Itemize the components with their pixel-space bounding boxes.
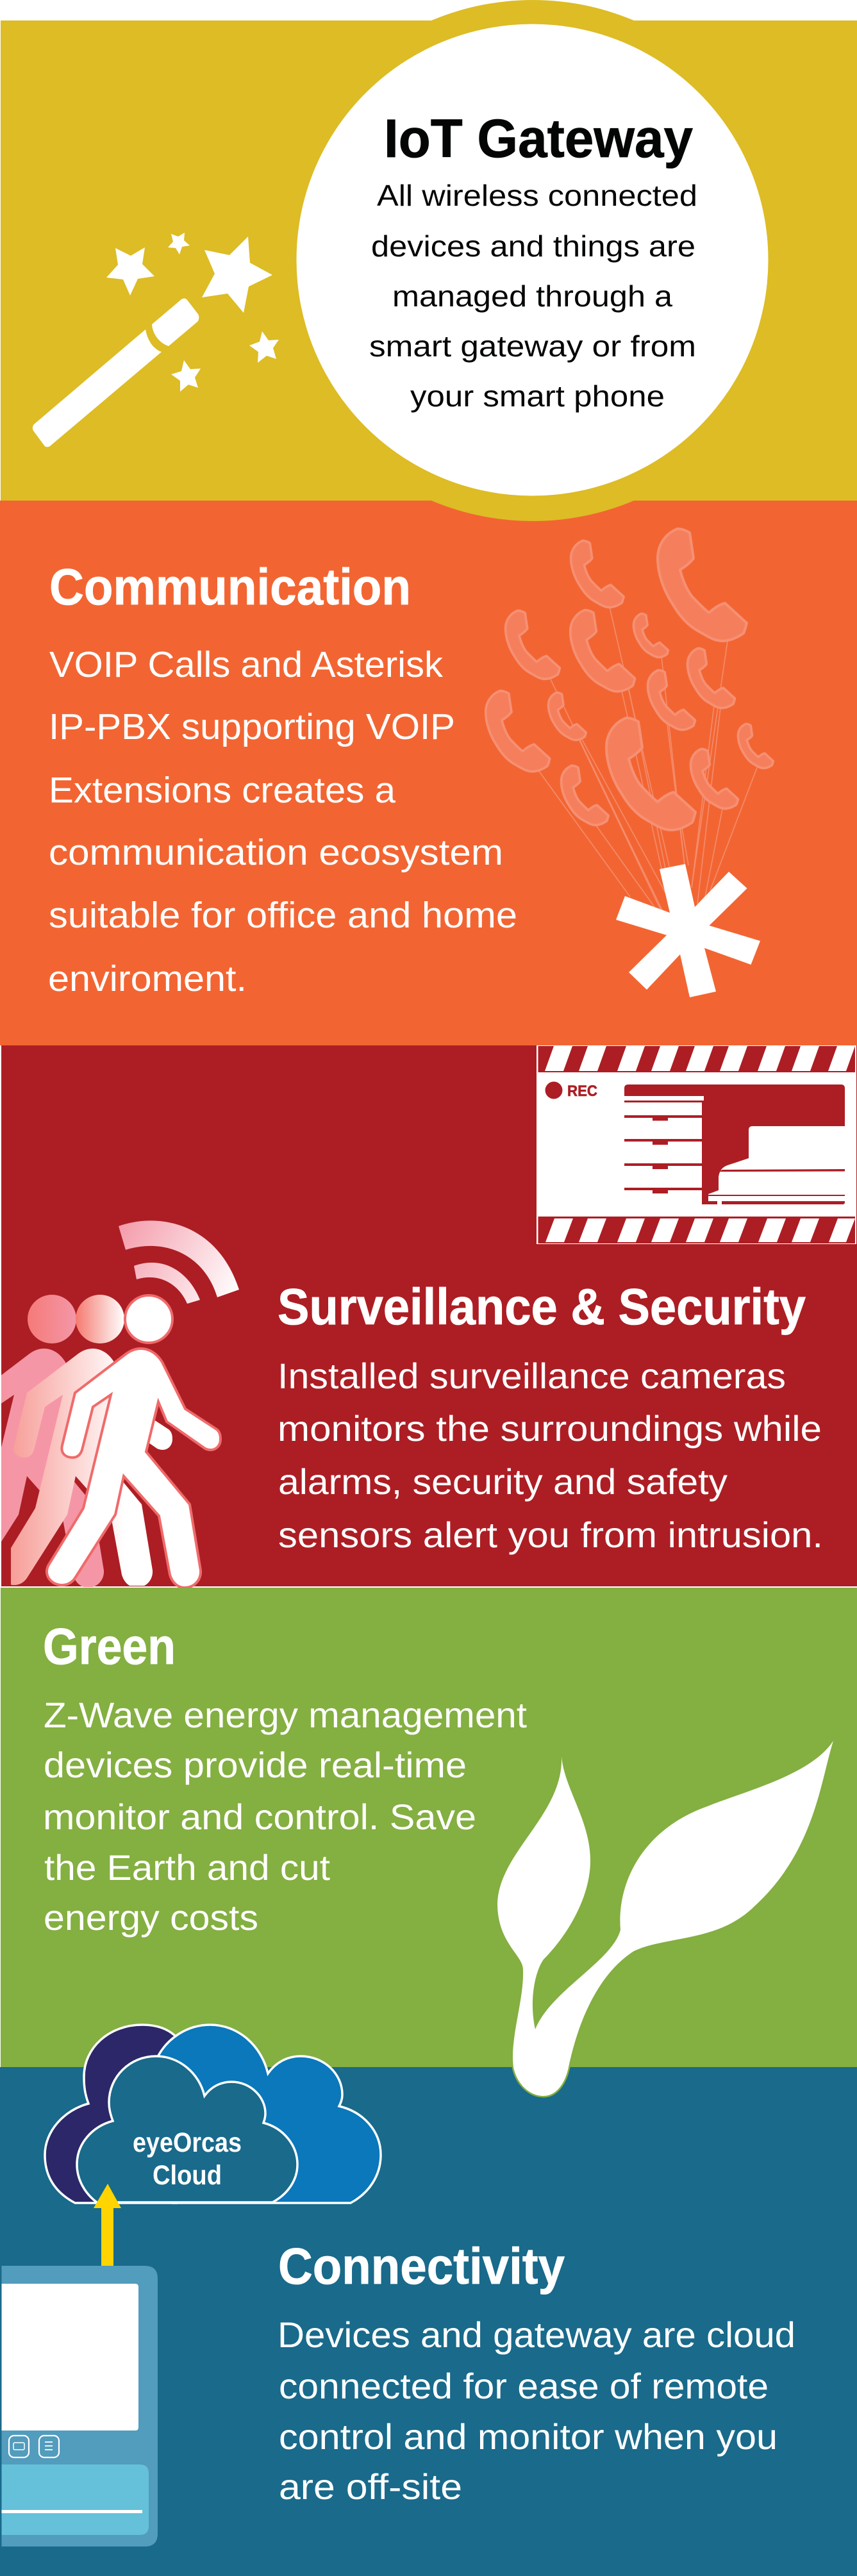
- cloud label: [133, 2127, 242, 2191]
- icon: camera silhouette: [624, 1084, 845, 1204]
- text: green description: devices provide real-time: [44, 1745, 467, 1785]
- display panel: [1, 2464, 149, 2535]
- heading: Green: Green: [43, 1618, 176, 1675]
- arrow: device to cloud: [94, 2184, 121, 2266]
- text: communication description: IP-PBX supporting VOIP: [49, 706, 455, 747]
- text: surveillance description: alarms, security and safety: [278, 1461, 728, 1502]
- front cloud: [77, 2056, 297, 2202]
- blue back cloud: [158, 2025, 381, 2203]
- heading: Communication: Communication: [49, 558, 411, 615]
- text: communication description: enviroment.: [48, 958, 247, 999]
- text: communication description: communication ecosystem: [49, 832, 503, 873]
- halo lower overlap: [431, 501, 634, 521]
- panel: IoT Gateway: [1, 0, 857, 520]
- phones: [486, 529, 773, 830]
- leaf outline: [497, 1741, 833, 2096]
- text: communication description: VOIP Calls and Asterisk: [49, 644, 443, 685]
- text: gateway description: smart gateway or from: [369, 329, 696, 363]
- panel: Green: [1, 1588, 857, 2067]
- panel: Surveillance and Security: [1, 1045, 857, 1586]
- heading: Surveillance & Security: Surveillance & Security: [278, 1278, 806, 1335]
- text: gateway description: devices and things are: [371, 229, 695, 263]
- front figure: [47, 1295, 220, 1588]
- text: surveillance description: Installed surveillance cameras: [278, 1356, 786, 1396]
- text: gateway description: All wireless connected: [377, 179, 697, 212]
- text: communication description: Extensions creates a: [49, 770, 395, 811]
- device body: [1, 2266, 158, 2547]
- text: green description: the Earth and cut: [44, 1847, 330, 1888]
- signal arcs: [119, 1220, 239, 1304]
- text: green description: energy costs: [44, 1897, 258, 1938]
- panel: Communication: [0, 501, 857, 1045]
- icon: phone balloons with strings: [486, 529, 773, 997]
- trail figure 1: [1, 1295, 104, 1587]
- trail figure 2: [0, 1295, 172, 1588]
- icon: sprouting leaf: [497, 1741, 833, 2096]
- panel: Connectivity: [0, 2067, 857, 2576]
- device screen: [1, 2284, 138, 2431]
- heading: IoT Gateway: IoT Gateway: [384, 108, 693, 169]
- text: green description: monitor and control. Save: [43, 1797, 476, 1837]
- text: connectivity description: Devices and gateway are cloud: [278, 2314, 795, 2355]
- text: green description: Z-Wave energy management: [44, 1695, 527, 1735]
- leaf fill: [497, 1741, 833, 2096]
- balloon strings: [538, 607, 758, 910]
- hazard band top: [538, 1046, 855, 1072]
- panel line: [1, 2510, 142, 2513]
- text: green description: [43, 1695, 527, 1938]
- icon: gateway device: [1, 2266, 158, 2547]
- text: connectivity description: connected for ease of remote: [279, 2366, 769, 2406]
- text: communication description: [48, 644, 517, 999]
- text: gateway description: your smart phone: [410, 379, 665, 413]
- text: surveillance description: monitors the surroundings while: [278, 1408, 822, 1449]
- text: surveillance description: [278, 1356, 823, 1555]
- button: window: [9, 2436, 29, 2457]
- text: surveillance description: sensors alert you from intrusion.: [278, 1515, 823, 1555]
- text: connectivity description: control and monitor when you: [279, 2416, 778, 2457]
- icon: walking person with motion trail and signal: [0, 1220, 239, 1588]
- icon: asterisk: [616, 864, 760, 997]
- label: REC: REC: [567, 1083, 597, 1100]
- hazard band bottom: [538, 1217, 855, 1243]
- icon: surveillance camera feed: [537, 1045, 856, 1244]
- text: gateway description: managed through a: [392, 279, 672, 313]
- text: connectivity description: are off-site: [279, 2466, 462, 2507]
- heading: Connectivity: Connectivity: [278, 2238, 565, 2295]
- icon: eyeOrcas cloud: [45, 2025, 381, 2203]
- text: gateway description: [369, 179, 697, 413]
- navy back cloud: [45, 2025, 176, 2203]
- button: menu: [39, 2436, 59, 2457]
- yellow circular halo: [272, 0, 793, 520]
- text: connectivity description: [278, 2314, 795, 2507]
- icon: record dot: [545, 1082, 563, 1099]
- text: communication description: suitable for office and home: [49, 895, 517, 936]
- icon: magic wand with stars: [33, 233, 279, 447]
- white circle: [296, 24, 768, 496]
- cloud label: Cloud: [153, 2160, 222, 2191]
- cloud label: eyeOrcas: [133, 2127, 242, 2158]
